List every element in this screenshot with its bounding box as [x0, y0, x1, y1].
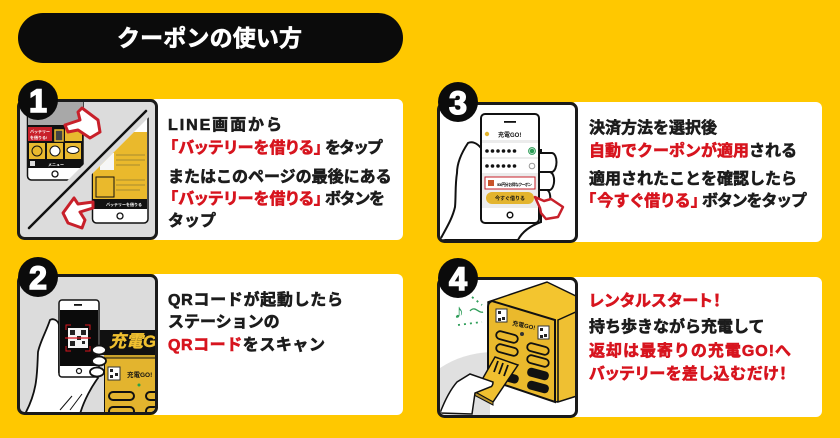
illustration 3: 充電GO!: [498, 131, 521, 139]
illustration 1: バッテリーを借りる: [106, 201, 142, 207]
step number 4: 4: [449, 261, 467, 297]
text block 1: タップ: [168, 212, 216, 230]
panel: step 4: [438, 258, 822, 417]
illustration 3: [438, 104, 576, 242]
text block 4: 持ち歩きながら充電して: [589, 317, 765, 336]
text block 3: ボタンをタップ: [702, 192, 807, 210]
step number 1: [18, 80, 58, 120]
illustration 4: ♪: [454, 301, 464, 323]
text block 4: [589, 292, 791, 383]
text block 3: 決済方法を選択後: [589, 118, 717, 137]
text card 1: [150, 99, 403, 240]
text card 3: [570, 102, 822, 242]
diagonal divider: [29, 111, 146, 228]
text block 1: [168, 116, 392, 230]
illustration 2: 充電GO!: [127, 370, 152, 379]
illustration 1: バッテリー: [30, 128, 50, 134]
illustration 1: を借りる!: [30, 134, 47, 140]
step number 3: [438, 82, 478, 122]
icon: hand pointer lower: [63, 198, 93, 228]
step number 1: 1: [29, 83, 47, 119]
step number 2: 2: [29, 260, 47, 296]
text block 1: 「バッテリーを借りる」: [170, 139, 322, 157]
step number 3: 3: [449, 85, 467, 121]
illustration 1: [18, 90, 156, 238]
text card 4: [570, 277, 822, 417]
text block 1: をタップ: [325, 139, 383, 157]
text block 4: 返却は最寄りの充電GO!へ: [589, 341, 791, 360]
text block 2: QRコードをスキャン: [168, 336, 325, 354]
hand: [440, 142, 541, 240]
panel: step 3: [438, 82, 822, 242]
text block 3: 自動でクーポンが適用される: [589, 141, 797, 160]
illustration 3: 500円分 お得なクーポン: [497, 181, 532, 187]
step number 4: [438, 258, 478, 298]
panel: step 1: [18, 80, 403, 240]
illustration 4: 充電GO!: [512, 319, 536, 332]
illustration 2: 充電GO: [109, 332, 169, 351]
illustration 3: 今すぐ借りる: [495, 195, 525, 202]
illustration 1: メニュー: [48, 162, 64, 167]
illustration 4: [438, 278, 580, 416]
text block 2: [168, 290, 343, 354]
text block 3: 適用されたことを確認したら: [589, 169, 797, 188]
title banner: [18, 13, 403, 63]
text block 3: 「今すぐ借りる」: [588, 191, 699, 210]
text block 1: LINE画面から: [168, 116, 282, 134]
text block 2: ステーションの: [168, 314, 280, 331]
text block 4: レンタルスタート！: [589, 292, 721, 310]
panel: step 2: [18, 257, 403, 415]
icon: hand pointer upper: [65, 108, 100, 138]
text block 1: ボタンを: [325, 190, 385, 208]
text block 1: 「バッテリーを借りる」: [170, 190, 322, 208]
text card 2: [150, 274, 403, 415]
icon: hand pointer: [535, 197, 563, 219]
hand: [25, 319, 98, 414]
text block 1: またはこのページの最後にある: [168, 167, 392, 186]
text block 3: [588, 118, 807, 210]
text block 4: バッテリーを差し込むだけ！: [589, 364, 787, 383]
illustration 2: [18, 276, 169, 415]
text block 2: QRコードが起動したら: [168, 290, 343, 309]
title banner: クーポンの使い方: [117, 25, 302, 51]
step number 2: [18, 257, 58, 297]
